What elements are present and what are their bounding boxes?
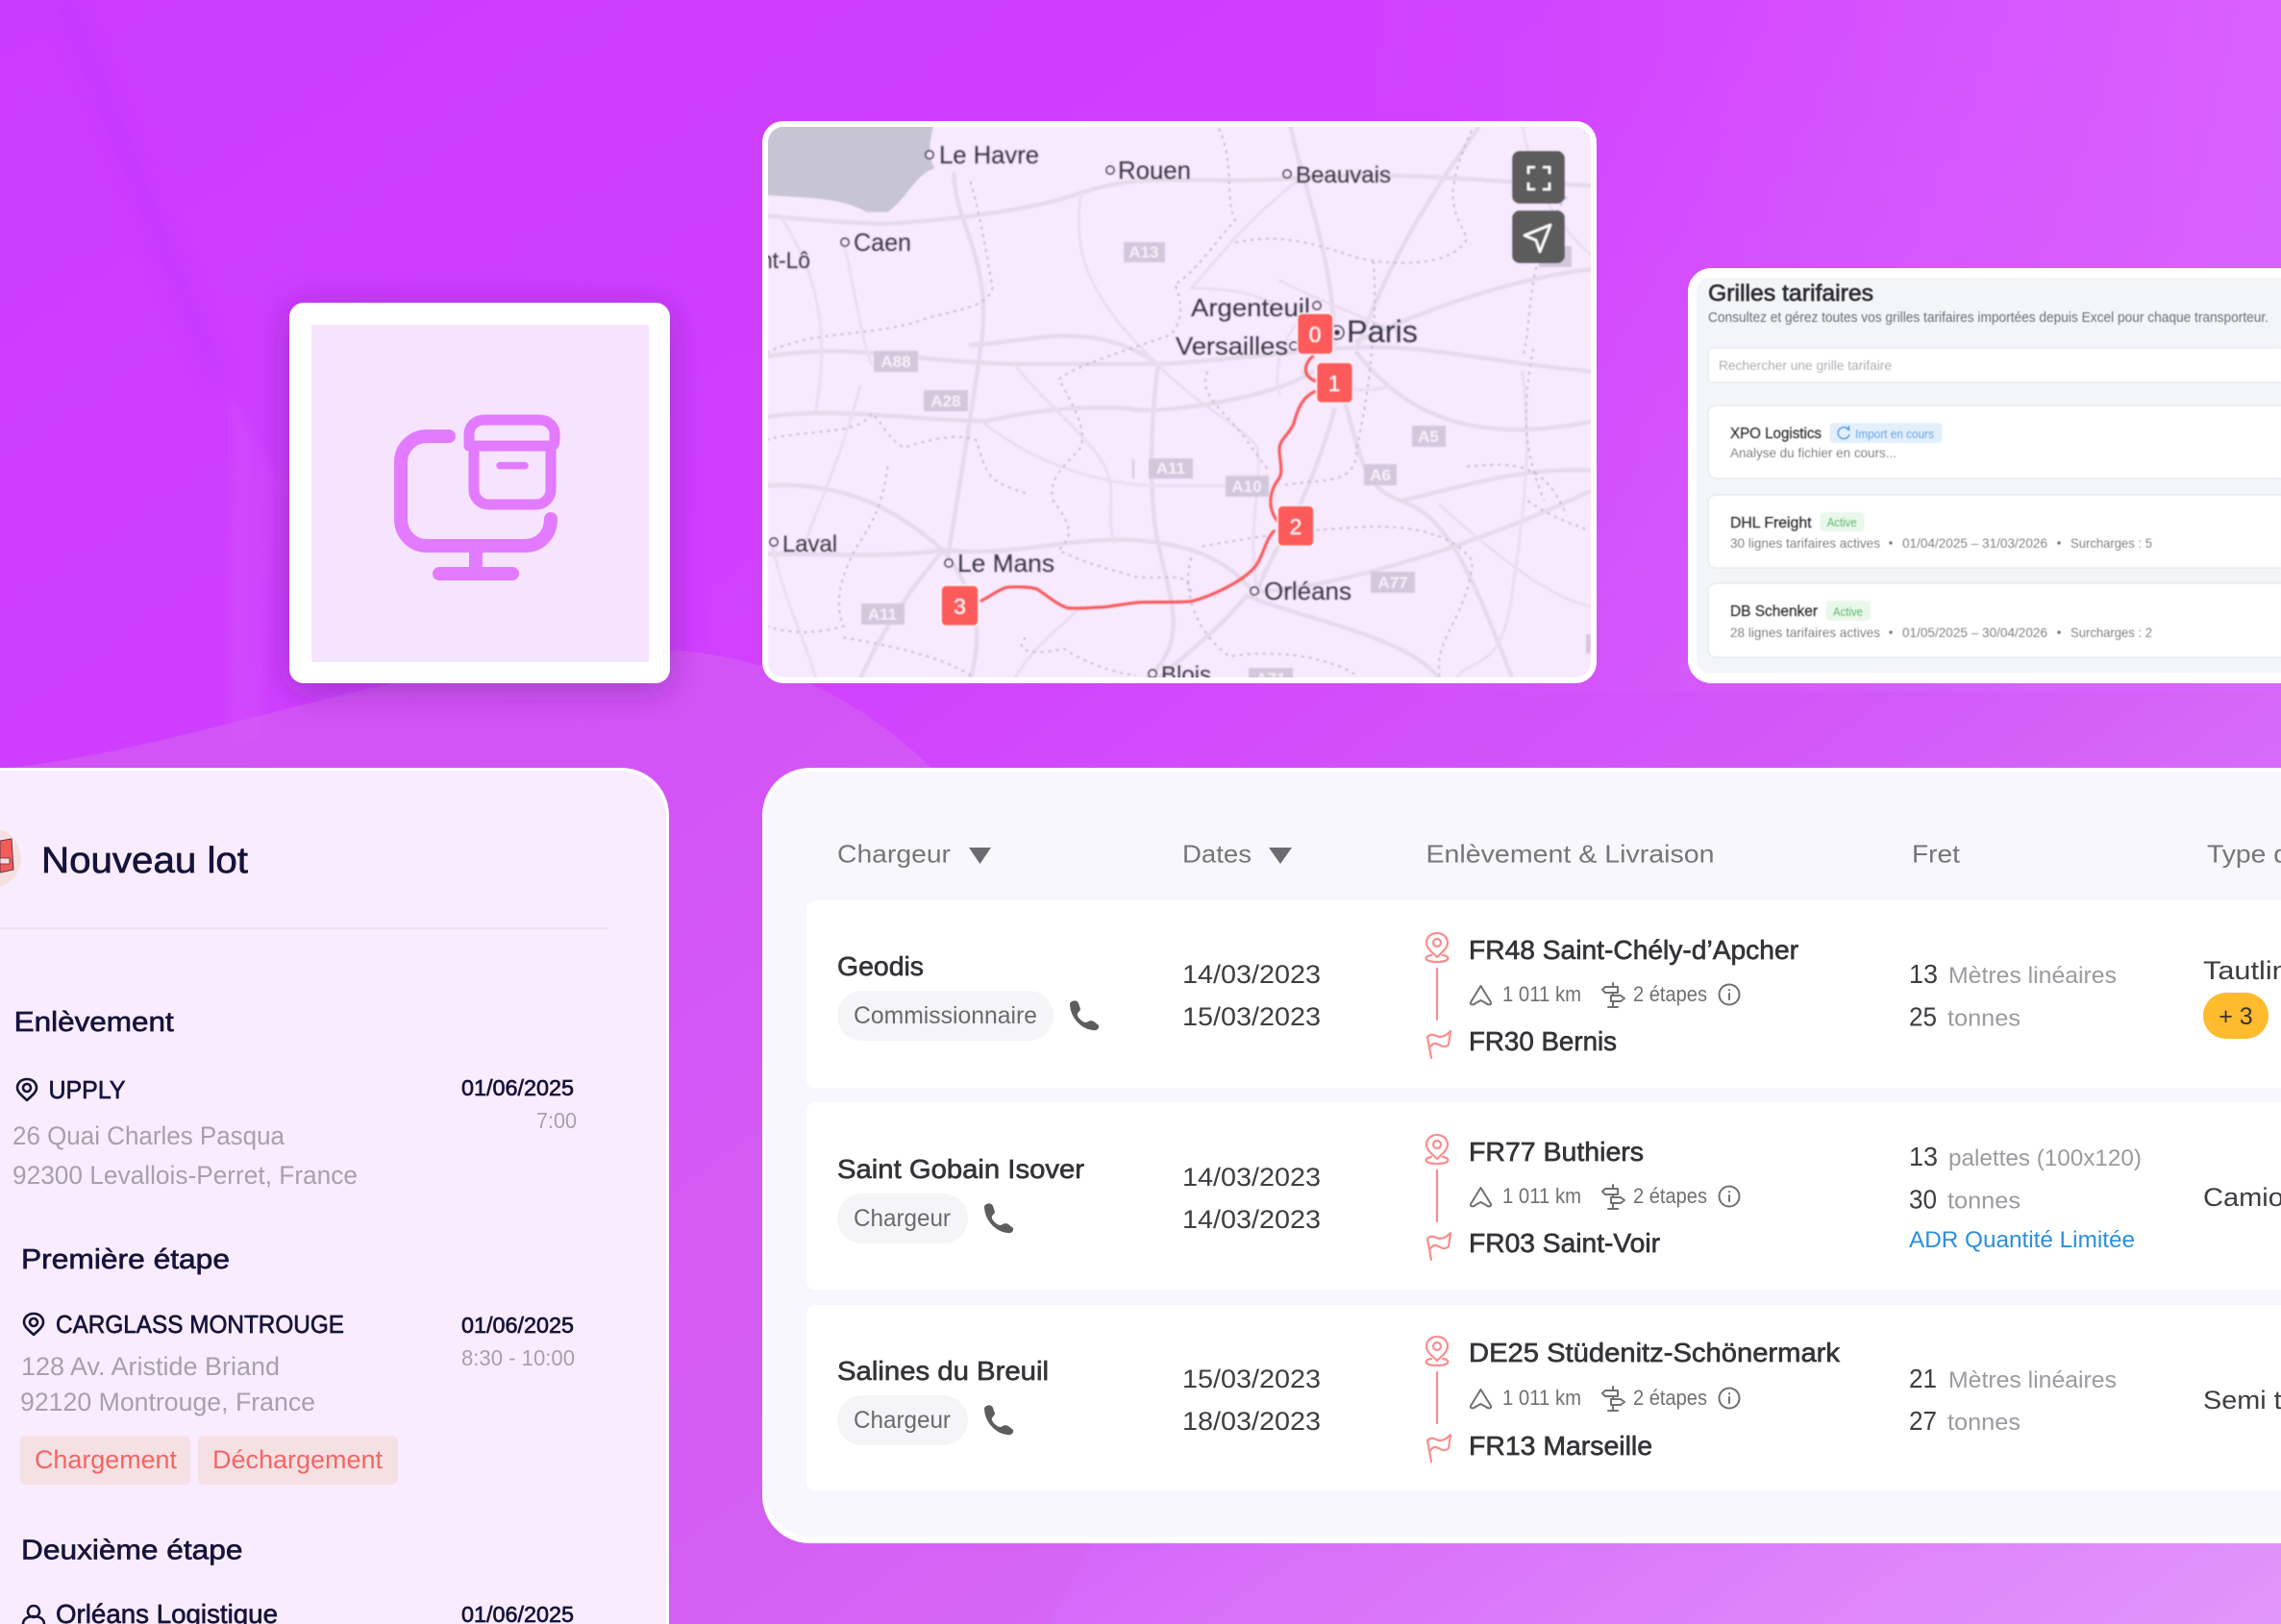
highway labels: A77	[1377, 574, 1408, 592]
card: DHL Freight: Surcharges : 5	[2070, 535, 2152, 551]
map buttons	[1512, 151, 1565, 263]
panel: nouveau lot	[0, 768, 669, 1624]
icon: avatar truck	[0, 829, 21, 887]
row: Geodis: Commissionnaire	[854, 1002, 1037, 1029]
row: Salines du Breuil: Chargeur	[854, 1407, 951, 1434]
search field: Rechercher une grille tarifaire	[1719, 357, 1892, 373]
city labels: Rouen	[1118, 156, 1191, 185]
city labels: Blois	[1161, 662, 1211, 688]
route markers: 2	[1290, 514, 1302, 539]
highway labels: A11	[1156, 459, 1185, 478]
section: première étape: Déchargement	[212, 1445, 383, 1474]
row: Saint Gobain Isover: 14/03/2023	[1182, 1205, 1321, 1234]
card: XPO Logistics: XPO Logistics	[1730, 426, 1822, 442]
row: Geodis: 2 étapes	[1633, 982, 1707, 1006]
highway labels: A88	[880, 353, 911, 371]
heading: Nouveau lot	[41, 841, 248, 881]
table header: Chargeur	[837, 840, 951, 869]
highway labels: A71	[1255, 670, 1286, 688]
card: DHL Freight: DHL Freight	[1730, 515, 1812, 531]
card: DB Schenker: DB Schenker	[1730, 603, 1819, 620]
city labels: Saint-Lô	[729, 248, 810, 274]
row: Salines du Breuil: 18/03/2023	[1182, 1407, 1321, 1436]
card: DHL Freight: 01/04/2025 – 31/03/2026	[1902, 535, 2047, 551]
highway labels: A13	[1128, 243, 1159, 261]
row: Saint Gobain Isover	[806, 1102, 2281, 1290]
city labels: Le Mans	[957, 549, 1054, 578]
highway labels: A6	[1370, 466, 1391, 484]
row: Saint Gobain Isover: palettes (100x120)	[1948, 1145, 2142, 1171]
city labels	[729, 140, 1418, 688]
highway labels: A11	[868, 605, 897, 624]
city labels: Paris	[1347, 314, 1418, 349]
card: DB Schenker: Active	[1833, 605, 1863, 619]
row: Saint Gobain Isover: tonnes	[1947, 1188, 2021, 1215]
row: Geodis: tonnes	[1947, 1005, 2021, 1032]
row: Saint Gobain Isover: Saint Gobain Isover	[837, 1154, 1084, 1184]
card: XPO Logistics	[1708, 406, 2281, 479]
row: Salines du Breuil	[806, 1305, 2281, 1490]
row: Saint Gobain Isover: FR77 Buthiers	[1469, 1137, 1644, 1167]
card: XPO Logistics: Import en cours	[1855, 427, 1934, 441]
card: DB Schenker	[1708, 583, 2281, 657]
highway labels: A28	[930, 392, 961, 410]
section: première étape: Première étape	[21, 1244, 230, 1275]
row: Saint Gobain Isover: 13	[1909, 1142, 1938, 1171]
row: Saint Gobain Isover: 1 011 km	[1502, 1184, 1581, 1208]
section: première étape: CARGLASS MONTROUGE	[56, 1310, 344, 1339]
row: Geodis: 25	[1909, 1001, 1937, 1032]
panel: grilles tarifaires	[1688, 268, 2281, 683]
icon: navigation arrow	[1525, 225, 1550, 252]
row: Geodis: 15/03/2023	[1182, 1002, 1321, 1031]
row: Salines du Breuil: Mètres linéaires	[1948, 1367, 2117, 1393]
table header	[837, 840, 2281, 869]
icon: monitor with box	[401, 420, 555, 574]
row: Saint Gobain Isover: 2 étapes	[1633, 1184, 1707, 1208]
icon: fullscreen	[1528, 167, 1550, 189]
route markers: 0	[1309, 322, 1321, 347]
card: DHL Freight: Active	[1827, 516, 1857, 529]
city labels: Le Havre	[939, 140, 1039, 169]
city labels: Caen	[854, 228, 911, 257]
table header: Fret	[1912, 840, 1961, 869]
row: Saint Gobain Isover: FR03 Saint-Voir	[1469, 1228, 1660, 1258]
row: Geodis: FR30 Bernis	[1469, 1026, 1617, 1056]
row: Saint Gobain Isover: 14/03/2023	[1182, 1163, 1321, 1192]
section: enlèvement: Enlèvement	[14, 1007, 174, 1038]
panel: map	[729, 121, 1597, 689]
table header: Enlèvement & Livraison	[1426, 840, 1715, 869]
city labels: Beauvais	[1296, 162, 1391, 188]
city labels: Orléans	[1264, 577, 1351, 605]
section: enlèvement: UPPLY	[48, 1075, 125, 1104]
city labels: Argenteuil	[1191, 293, 1310, 322]
city labels: Versailles	[1176, 332, 1288, 360]
section: deuxième étape: Deuxième étape	[21, 1536, 242, 1566]
map base with roads	[729, 121, 1594, 689]
section: première étape	[20, 1244, 575, 1485]
route markers: 1	[1328, 371, 1340, 396]
row: Salines du Breuil: 27	[1909, 1406, 1937, 1436]
section: enlèvement: 26 Quai Charles Pasqua	[12, 1121, 285, 1150]
section: enlèvement	[12, 1007, 577, 1190]
card: DHL Freight	[1708, 495, 2281, 568]
row: Salines du Breuil: 21	[1909, 1364, 1937, 1393]
section: deuxième étape	[21, 1536, 574, 1624]
section: première étape: 92120 Montrouge, France	[20, 1388, 315, 1416]
row: Geodis: + 3	[2219, 1003, 2253, 1030]
highway labels	[861, 242, 1591, 689]
city labels: Laval	[782, 531, 837, 557]
row: Salines du Breuil: 15/03/2023	[1182, 1365, 1321, 1393]
section: première étape: Chargement	[35, 1445, 177, 1474]
row: Geodis	[806, 900, 2281, 1088]
row: Salines du Breuil: tonnes	[1947, 1410, 2021, 1436]
card: DB Schenker: 01/05/2025 – 30/04/2026	[1902, 625, 2047, 640]
section: première étape: 8:30 - 10:00	[461, 1345, 575, 1370]
row: Salines du Breuil: 2 étapes	[1633, 1386, 1707, 1410]
section: enlèvement: 7:00	[536, 1108, 577, 1133]
row: Geodis: 1 011 km	[1502, 982, 1581, 1006]
highway labels: A10	[1231, 478, 1262, 496]
table header: Dates	[1182, 840, 1252, 869]
row: Salines du Breuil: DE25 Stüdenitz-Schönermark	[1469, 1338, 1841, 1367]
search field	[1708, 348, 2281, 382]
heading: Grilles tarifaires	[1708, 281, 1873, 307]
row: Geodis: 13	[1909, 959, 1938, 989]
panel: table	[762, 768, 2281, 1543]
row: Geodis: 14/03/2023	[1182, 960, 1321, 989]
card: DHL Freight: 30 lignes tarifaires actives	[1730, 535, 1880, 551]
row: Saint Gobain Isover: 30	[1909, 1184, 1937, 1215]
section: enlèvement: 01/06/2025	[461, 1075, 574, 1100]
route markers	[941, 313, 1353, 627]
row: Geodis: Geodis	[837, 951, 924, 981]
card: DB Schenker: 28 lignes tarifaires actives	[1730, 625, 1880, 640]
row: Saint Gobain Isover: Chargeur	[854, 1205, 951, 1232]
row: Geodis: Mètres linéaires	[1948, 963, 2117, 989]
section: première étape: 128 Av. Aristide Briand	[21, 1352, 280, 1381]
row: Geodis: FR48 Saint-Chély-d’Apcher	[1469, 935, 1798, 965]
row: Salines du Breuil: 1 011 km	[1502, 1386, 1581, 1410]
section: première étape: 01/06/2025	[461, 1313, 574, 1338]
section: enlèvement: 92300 Levallois-Perret, France	[12, 1161, 358, 1190]
card: XPO Logistics: Analyse du fichier en cours...	[1730, 445, 1897, 460]
row: Salines du Breuil: FR13 Marseille	[1469, 1431, 1652, 1461]
row: Saint Gobain Isover: ADR Quantité Limitée	[1909, 1227, 2135, 1253]
highway labels: A5	[1418, 428, 1439, 446]
route markers: 3	[954, 594, 966, 619]
row: Salines du Breuil: Salines du Breuil	[837, 1356, 1049, 1386]
panel: icon tile	[289, 303, 670, 683]
card: DB Schenker: Surcharges : 2	[2070, 625, 2152, 640]
route line	[981, 357, 1315, 608]
